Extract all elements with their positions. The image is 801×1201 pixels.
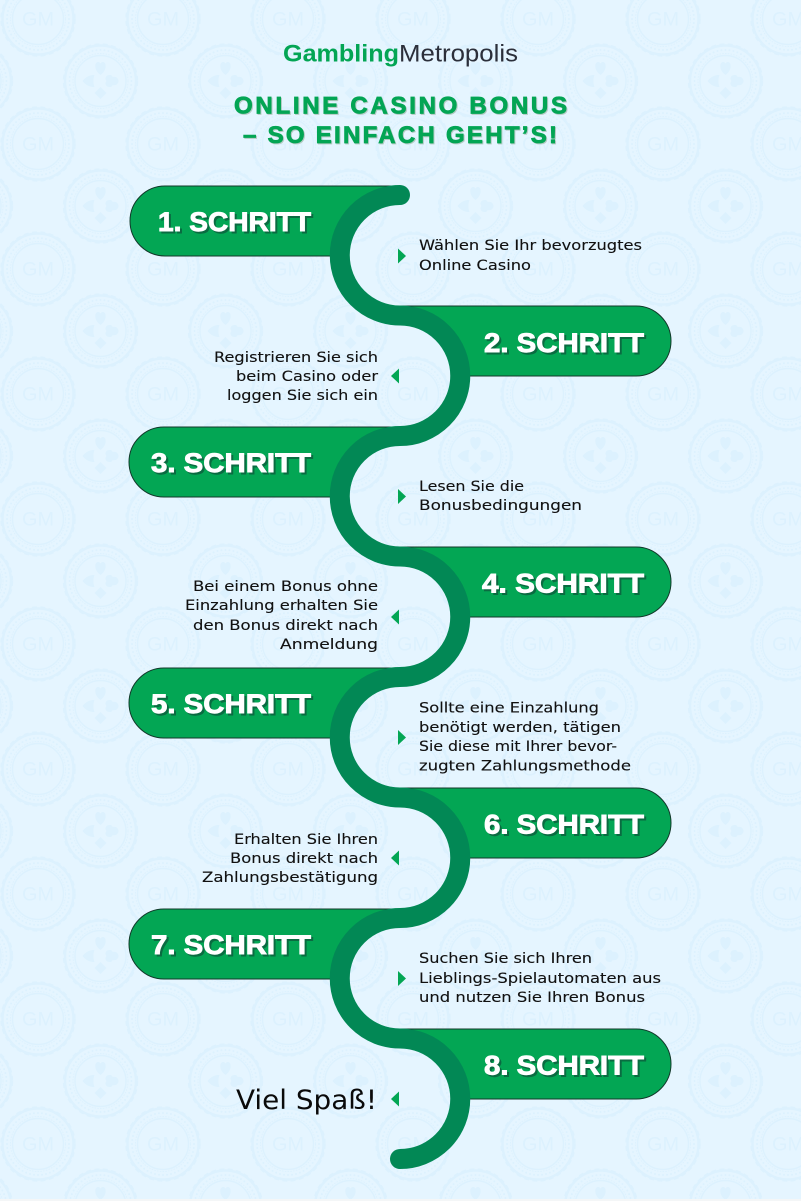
text: step 7: und nutzen Sie Ihren Bonus: [419, 990, 645, 1006]
text: step 4: [185, 579, 378, 653]
step 8 bar: [400, 1029, 671, 1099]
text: step 1: Wählen Sie Ihr bevorzugtes: [419, 238, 642, 254]
step 6 bar: 6. SCHRITT: [484, 810, 645, 840]
step 4 bar: 4. SCHRITT: [482, 568, 645, 598]
text: step 5: Sie diese mit Ihrer bevor-: [419, 739, 617, 755]
text: step 6: Bonus direkt nach: [230, 851, 378, 867]
text: step 4: Bei einem Bonus ohne: [193, 579, 378, 595]
arrow 5: [398, 730, 406, 745]
arrow 2: [391, 368, 399, 384]
text: step 6: Erhalten Sie Ihren: [234, 832, 378, 848]
text: step 4: den Bonus direkt nach: [193, 618, 378, 634]
step 3 bar: 3. SCHRITT: [151, 448, 312, 478]
text: step 3: Lesen Sie die: [419, 479, 524, 495]
step 1 bar: [130, 186, 400, 256]
text: step 6: [202, 832, 378, 886]
text: step 5: Sollte eine Einzahlung: [419, 700, 599, 716]
arrow 6: [391, 850, 399, 866]
text: step 3: [419, 479, 582, 514]
text: step 5: [419, 700, 631, 774]
step 2 bar: [400, 306, 671, 376]
logo: Gambling Metropolis: Metropolis: [399, 40, 518, 68]
arrow 7: [398, 971, 406, 986]
logo: Gambling Metropolis: [283, 40, 518, 68]
text: step 1: [419, 238, 642, 274]
step 7 bar: [129, 909, 400, 979]
text: step 8, Viel Spaß: Viel Spaß!: [236, 1085, 377, 1116]
step 4 bar: [400, 547, 671, 617]
title: ONLINE CASINO BONUS: [234, 92, 567, 120]
step 3 bar: [129, 427, 400, 497]
text: step 2: [214, 350, 378, 404]
step 5 bar: 5. SCHRITT: [151, 689, 312, 719]
text: step 5: zugten Zahlungsmethode: [419, 758, 631, 774]
text: step 5: benötigt werden, tätigen: [419, 720, 621, 736]
arrow 8: [391, 1092, 399, 1106]
step 7 bar: 7. SCHRITT: [151, 930, 312, 960]
step 5 bar: [129, 668, 400, 738]
text: step 2: Registrieren Sie sich: [214, 350, 378, 366]
arrow 3: [398, 489, 406, 504]
step 8 bar: 8. SCHRITT: [484, 1050, 645, 1080]
arrow 4: [391, 610, 399, 624]
text: step 2: loggen Sie sich ein: [227, 388, 378, 404]
step 6 bar: [400, 788, 671, 858]
text: step 1: Online Casino: [419, 258, 531, 274]
text: step 7: [419, 951, 661, 1006]
text: step 2: beim Casino oder: [236, 369, 378, 385]
text: step 7: Suchen Sie sich Ihren: [419, 951, 592, 967]
arrow 1: [398, 248, 406, 264]
title: – SO EINFACH GEHT’S!: [243, 122, 557, 149]
winding ribbon path: [340, 195, 460, 1159]
title: [234, 92, 567, 149]
step 1 bar: 1. SCHRITT: [158, 207, 312, 237]
text: step 7: Lieblings-Spielautomaten aus: [419, 971, 661, 987]
text: step 6: Zahlungsbestätigung: [202, 870, 378, 886]
step 2 bar: 2. SCHRITT: [484, 328, 645, 358]
text: step 4: Einzahlung erhalten Sie: [185, 598, 378, 614]
logo: Gambling Metropolis: Gambling: [283, 40, 399, 68]
text: step 4: Anmeldung: [280, 637, 378, 653]
text: step 3: Bonusbedingungen: [419, 498, 582, 514]
